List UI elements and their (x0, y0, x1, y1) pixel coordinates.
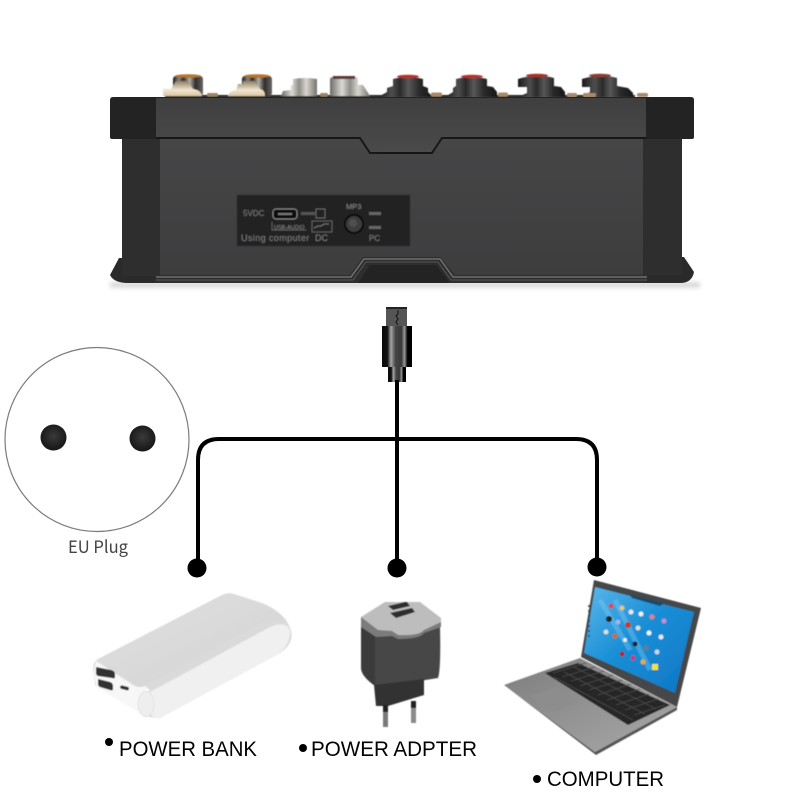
label: power bank: POWER BANK (119, 738, 257, 761)
switch button (344, 214, 364, 234)
MP3 label: MP3 (346, 202, 361, 211)
touchpad (530, 687, 578, 712)
desktop icons (604, 604, 666, 670)
DC label: DC (315, 233, 328, 243)
laptop base (504, 658, 677, 752)
icon: power adapter (361, 602, 441, 727)
screen frame (581, 580, 701, 707)
5VDC label: 5VDC (243, 209, 265, 218)
EU plug diagram (5, 348, 189, 558)
gold nuts (207, 93, 218, 96)
keyboard (545, 663, 670, 725)
Using computer label: Using computer (241, 233, 310, 243)
lid (110, 97, 694, 139)
EU Plug label: EU Plug (68, 533, 128, 558)
connection dots (188, 558, 606, 578)
base foot (110, 258, 156, 283)
PC label: PC (369, 234, 380, 243)
black knobs (378, 77, 433, 97)
chrome sockets (173, 76, 203, 96)
branching cable lines (198, 380, 597, 568)
micro USB port (273, 209, 297, 219)
mixer device rear view (110, 74, 700, 289)
micro USB cable plug (382, 307, 412, 382)
connector panel: USB-AUDIO (274, 225, 305, 231)
icon: laptop computer (504, 580, 701, 755)
lighter centre face (160, 139, 643, 276)
main body sides (122, 138, 682, 278)
USB audio label (272, 222, 306, 230)
connector panel (237, 195, 410, 246)
icon: power bank (93, 593, 292, 718)
label: computer: COMPUTER (547, 768, 664, 791)
input knobs and sockets (163, 74, 648, 98)
label: power adapter: POWER ADPTER (311, 738, 477, 761)
screen (584, 587, 694, 693)
